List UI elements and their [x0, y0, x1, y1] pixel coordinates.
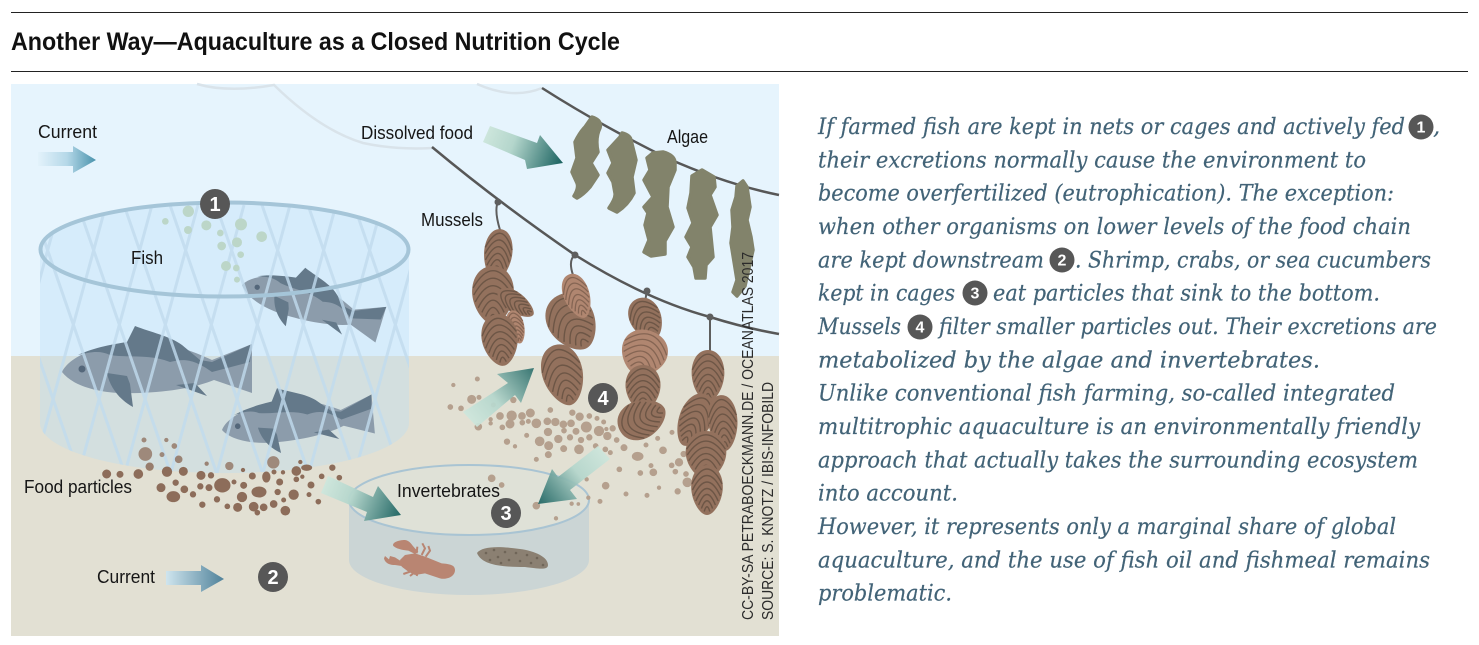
text block: explanation: become overfertilized (eutrophication). The exception: — [818, 181, 1394, 207]
badge 3: 3 — [500, 503, 512, 525]
text block: explanation: when other organisms on lower levels of the food chain — [818, 214, 1411, 240]
seabed background — [11, 356, 779, 636]
badge 2: 2 — [267, 567, 279, 589]
source line: SOURCE: S. KNOTZ / IBIS-INFOBILD — [760, 382, 777, 620]
inline badge 1 — [1408, 114, 1434, 140]
text block: explanation: Mussels — [817, 314, 901, 340]
invertebrate tray — [349, 465, 589, 595]
cage body — [40, 202, 409, 473]
sea cucumber — [477, 547, 548, 569]
arrow: dissolved food to algae — [483, 126, 563, 169]
text block: explanation: aquaculture, and the use of fish oil and fishmeal remains — [818, 547, 1430, 573]
text block: explanation: kept in cages — [818, 281, 955, 307]
fish: lower right — [219, 380, 376, 458]
top rule — [11, 12, 1468, 13]
algae — [572, 117, 753, 296]
ropes — [432, 88, 779, 334]
title: Another Way—Aquaculture as a Closed Nutrition Cycle — [11, 28, 620, 56]
surface waves — [197, 84, 542, 148]
label: dissolved food: Dissolved food — [361, 122, 473, 143]
label: fish: Fish — [131, 247, 163, 268]
badge 4: 4 — [597, 388, 609, 410]
text block: explanation: However, it represents only a marginal share of global — [817, 514, 1396, 540]
mussels cluster 1 — [472, 228, 539, 368]
mussels cluster 4 — [668, 350, 740, 515]
fish: large — [62, 326, 252, 407]
hanger lines — [496, 202, 710, 352]
tray body — [349, 500, 589, 595]
text block: explanation: metabolized by the algae and invertebrates. — [818, 347, 1320, 373]
label: food particles: Food particles — [24, 476, 132, 497]
text block: explanation: multitrophic aquaculture is an environmentally friendly — [818, 414, 1420, 440]
inline badge 4: 4 — [916, 320, 925, 336]
badge 1: 1 — [209, 194, 221, 216]
arrow: particles to invertebrates — [321, 476, 401, 521]
inline badge 3: 3 — [971, 286, 980, 302]
text block: explanation: filter smaller particles out. Their excretions are — [937, 314, 1437, 340]
label: algae: Algae — [667, 126, 708, 147]
badge 1 — [200, 189, 230, 219]
mussel excretion particles — [448, 377, 692, 520]
tray top — [349, 465, 589, 535]
inline badge 2 — [1050, 248, 1074, 272]
label: current: Current — [38, 121, 97, 142]
cage rim — [40, 202, 408, 296]
badge 2 — [258, 562, 288, 592]
text block: explanation: eat particles that sink to the bottom. — [993, 281, 1380, 307]
text block: explanation: . Shrimp, crabs, or sea cucumbers — [1075, 247, 1431, 273]
inline badge 1: 1 — [1417, 120, 1426, 136]
panel: aquaculture illustration — [0, 84, 779, 636]
text block: explanation: approach that actually takes the surrounding ecosystem — [818, 447, 1418, 473]
credit line: CC-BY-SA PETRABOECKMANN.DE / OCEANATLAS 2017 — [740, 252, 757, 620]
text block: explanation: problematic. — [818, 581, 952, 607]
label: invertebrates: Invertebrates — [397, 480, 500, 501]
arrow: current on seabed — [166, 565, 224, 592]
inline badge 4 — [908, 314, 932, 340]
inline badge 2: 2 — [1058, 252, 1067, 270]
excretion bubbles — [162, 206, 267, 283]
food particles — [103, 438, 342, 515]
badge 4 — [588, 383, 618, 413]
text block: explanation: , — [1433, 114, 1440, 140]
arrow: current in water — [38, 146, 96, 173]
title rule — [11, 71, 1468, 72]
text block: explanation: If farmed fish are kept in nets or cages and actively fed — [817, 114, 1405, 140]
badge 3 — [491, 498, 521, 528]
text block: explanation: Unlike conventional fish farming, so-called integrated — [818, 381, 1395, 407]
label: mussels: Mussels — [421, 209, 483, 230]
mussels cluster 3 — [611, 292, 674, 447]
arrow: particles to mussels — [463, 368, 534, 427]
text block: explanation: are kept downstream — [818, 247, 1044, 273]
inline badge 3 — [962, 280, 988, 306]
label: current seabed: Current — [97, 566, 155, 587]
rope knots — [494, 198, 714, 320]
lobster — [384, 540, 455, 579]
fish cage with fish — [38, 200, 410, 473]
cage netting — [40, 205, 409, 473]
text block: explanation: their excretions normally cause the environment to — [818, 147, 1366, 173]
mussels cluster 2 — [535, 270, 608, 410]
text block: explanation — [817, 114, 1440, 607]
fish: upper right — [234, 252, 390, 353]
arrow: mussel waste to invertebrates — [538, 446, 610, 504]
text block: explanation: into account. — [818, 481, 958, 507]
water background — [11, 84, 779, 356]
